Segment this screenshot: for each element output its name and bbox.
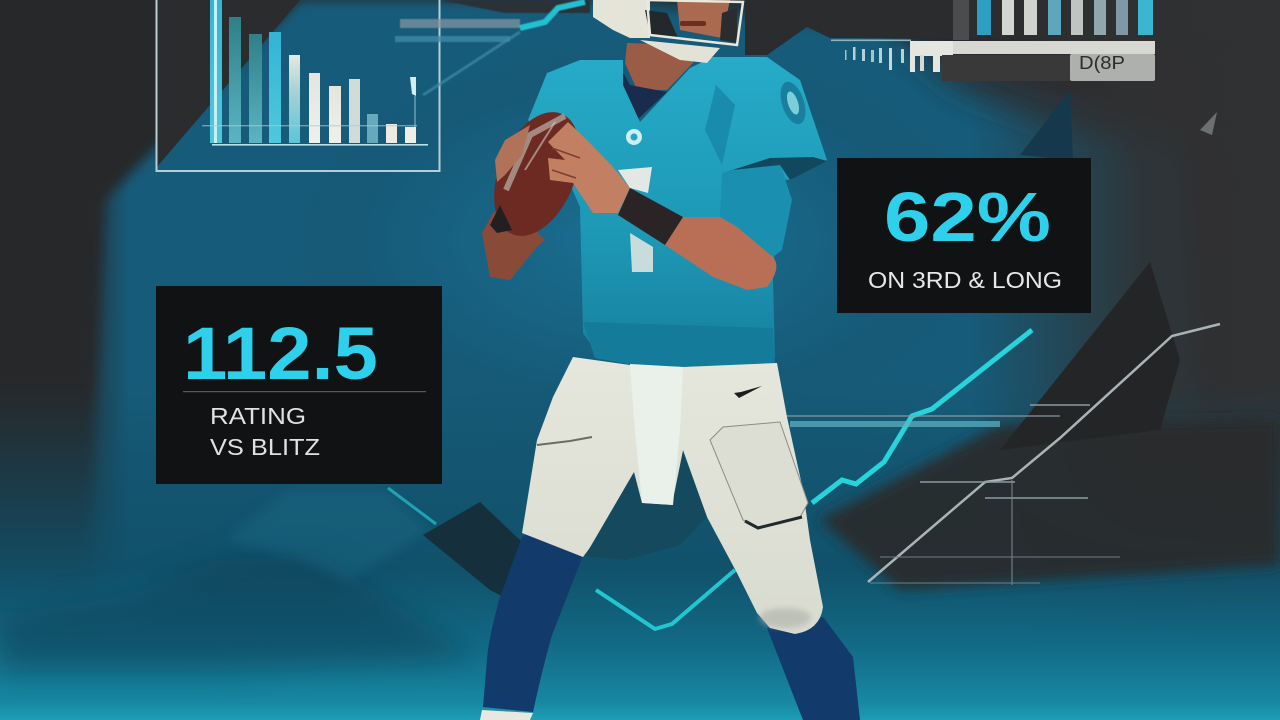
sleeve patch xyxy=(776,79,810,127)
top-left connector lines xyxy=(395,2,585,95)
trend line: grey chart line with grid xyxy=(785,324,1220,585)
callout: 112.5 rating vs blitz: VS BLITZ xyxy=(210,434,320,460)
left leg sleeve xyxy=(480,530,582,720)
football xyxy=(477,99,597,249)
helmet xyxy=(593,0,743,63)
pants xyxy=(522,357,823,634)
top-right data panel: D(8P xyxy=(1079,53,1125,73)
trend line: cyan chart line xyxy=(388,330,1032,629)
hands xyxy=(490,122,630,233)
forearm xyxy=(665,217,776,290)
jersey sleeve fold xyxy=(705,85,735,165)
neck xyxy=(625,43,693,90)
callout: 112.5 rating vs blitz: 112.5 xyxy=(183,312,378,395)
callout: 62% on 3rd and long: 62% xyxy=(884,178,1051,256)
towel xyxy=(630,364,683,505)
knee shading xyxy=(759,608,811,628)
sleeve underside shadow xyxy=(723,157,827,180)
callout: 112.5 rating vs blitz xyxy=(156,286,442,484)
right leg sleeve xyxy=(767,617,860,720)
jersey number xyxy=(618,167,653,272)
pad shadow xyxy=(745,517,802,528)
jersey lower hem xyxy=(583,322,775,368)
logo: swoosh xyxy=(734,386,762,398)
top-right data panel xyxy=(831,40,1155,81)
callout: 62% on 3rd and long: ON 3RD & LONG xyxy=(868,267,1062,293)
collar badge xyxy=(626,129,642,145)
right sleeve arm xyxy=(720,163,792,257)
chart: top-right bar chart xyxy=(953,0,1153,40)
left arm xyxy=(482,205,545,280)
player: quarterback illustration xyxy=(477,0,860,720)
chart: top-left bar chart in frame xyxy=(156,0,440,171)
wristband xyxy=(618,188,683,245)
crotch shadow xyxy=(585,452,707,560)
jersey torso and sleeve xyxy=(528,57,827,366)
thigh pad xyxy=(710,422,808,527)
left thigh seam xyxy=(537,437,592,445)
undershirt collar xyxy=(620,67,667,120)
callout: 62% on 3rd and long xyxy=(837,158,1091,313)
callout: 112.5 rating vs blitz: RATING xyxy=(210,403,306,429)
